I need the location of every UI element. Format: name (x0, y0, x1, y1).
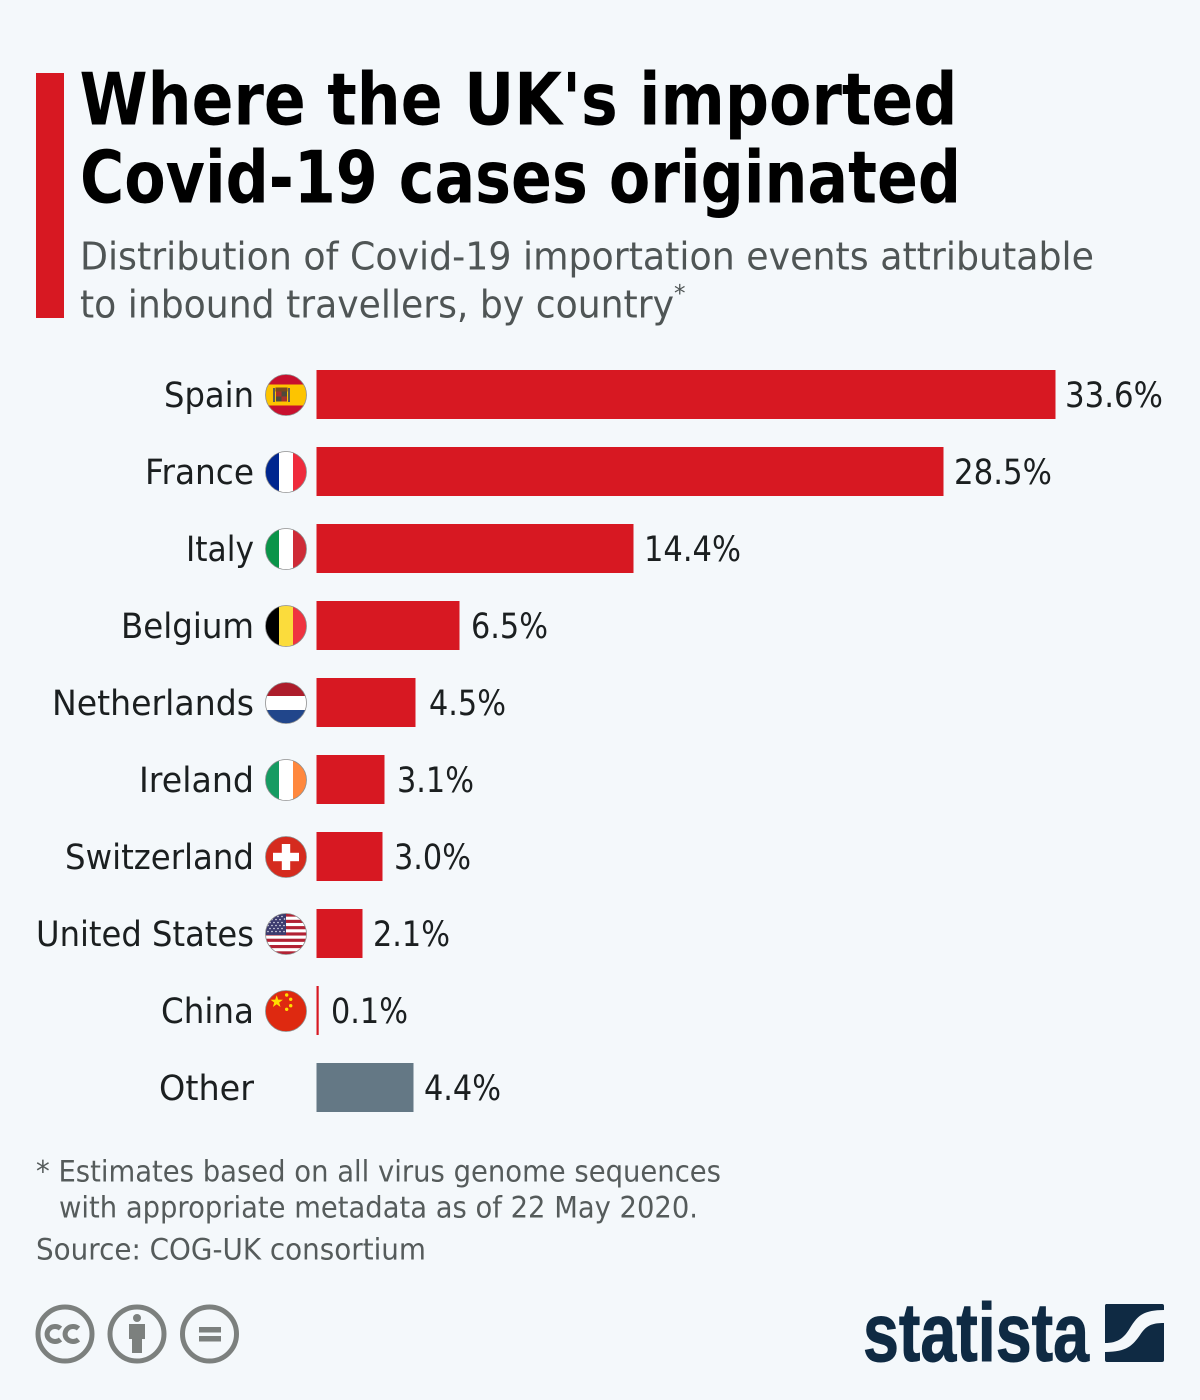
flag: Italy (265, 528, 307, 570)
country labels: Netherlands (52, 684, 254, 724)
flag: United States (265, 913, 307, 955)
statista wordmark: statista (863, 1286, 1090, 1379)
value labels: 0.1% (331, 992, 408, 1032)
value labels: 14.4% (644, 530, 741, 570)
title: Where the UK's imported (80, 58, 958, 142)
icon: attribution (110, 1307, 164, 1361)
value labels: 3.0% (394, 838, 471, 878)
country labels: Ireland (139, 761, 254, 801)
flag: Ireland (265, 759, 307, 801)
bar: France (316, 447, 944, 496)
bar chart (316, 370, 1056, 1112)
country labels: Italy (186, 530, 254, 570)
statista logo mark (1105, 1304, 1164, 1362)
flag: Switzerland (266, 836, 306, 878)
country labels: France (145, 453, 254, 493)
country labels: Other (159, 1069, 255, 1109)
flag: China (266, 990, 306, 1032)
bar: China (316, 986, 319, 1035)
country labels: United States (36, 915, 254, 955)
source: Source: COG-UK consortium (36, 1232, 426, 1266)
bar: United States (316, 909, 362, 958)
title (80, 58, 961, 220)
flag: Spain (265, 374, 307, 416)
value labels: 33.6% (1065, 376, 1163, 416)
country labels (36, 376, 255, 1109)
subtitle: to inbound travellers, by country (80, 282, 674, 328)
country labels: China (161, 992, 254, 1032)
bar: Netherlands (316, 678, 416, 727)
flag: Netherlands (265, 682, 307, 724)
bar: Switzerland (316, 832, 382, 881)
subtitle (80, 234, 1094, 328)
icon: creative commons CC (38, 1307, 92, 1361)
value labels: 3.1% (397, 761, 474, 801)
value labels: 6.5% (471, 607, 548, 647)
bar: Spain (316, 370, 1056, 419)
value labels: 2.1% (373, 915, 450, 955)
country labels: Belgium (121, 607, 254, 647)
title accent bar (36, 73, 64, 318)
footnote: * Estimates based on all virus genome sequences (36, 1154, 721, 1188)
country labels: Spain (164, 376, 254, 416)
country labels: Switzerland (65, 838, 254, 878)
value labels: 4.5% (429, 684, 506, 724)
value labels: 28.5% (954, 453, 1052, 493)
subtitle: Distribution of Covid-19 importation events attributable (80, 234, 1094, 280)
bar: Italy (316, 524, 634, 573)
bar: Belgium (316, 601, 460, 650)
subtitle: * (674, 281, 686, 307)
value labels (331, 376, 1163, 1109)
footnote (36, 1154, 721, 1224)
value labels: 4.4% (424, 1069, 501, 1109)
bar: Other (316, 1063, 414, 1112)
bar: Ireland (316, 755, 384, 804)
icon: no derivatives (182, 1307, 236, 1361)
footnote: with appropriate metadata as of 22 May 2020. (59, 1190, 698, 1224)
flag: Belgium (265, 605, 307, 647)
flag: France (265, 451, 307, 493)
title: Covid-19 cases originated (80, 136, 961, 220)
